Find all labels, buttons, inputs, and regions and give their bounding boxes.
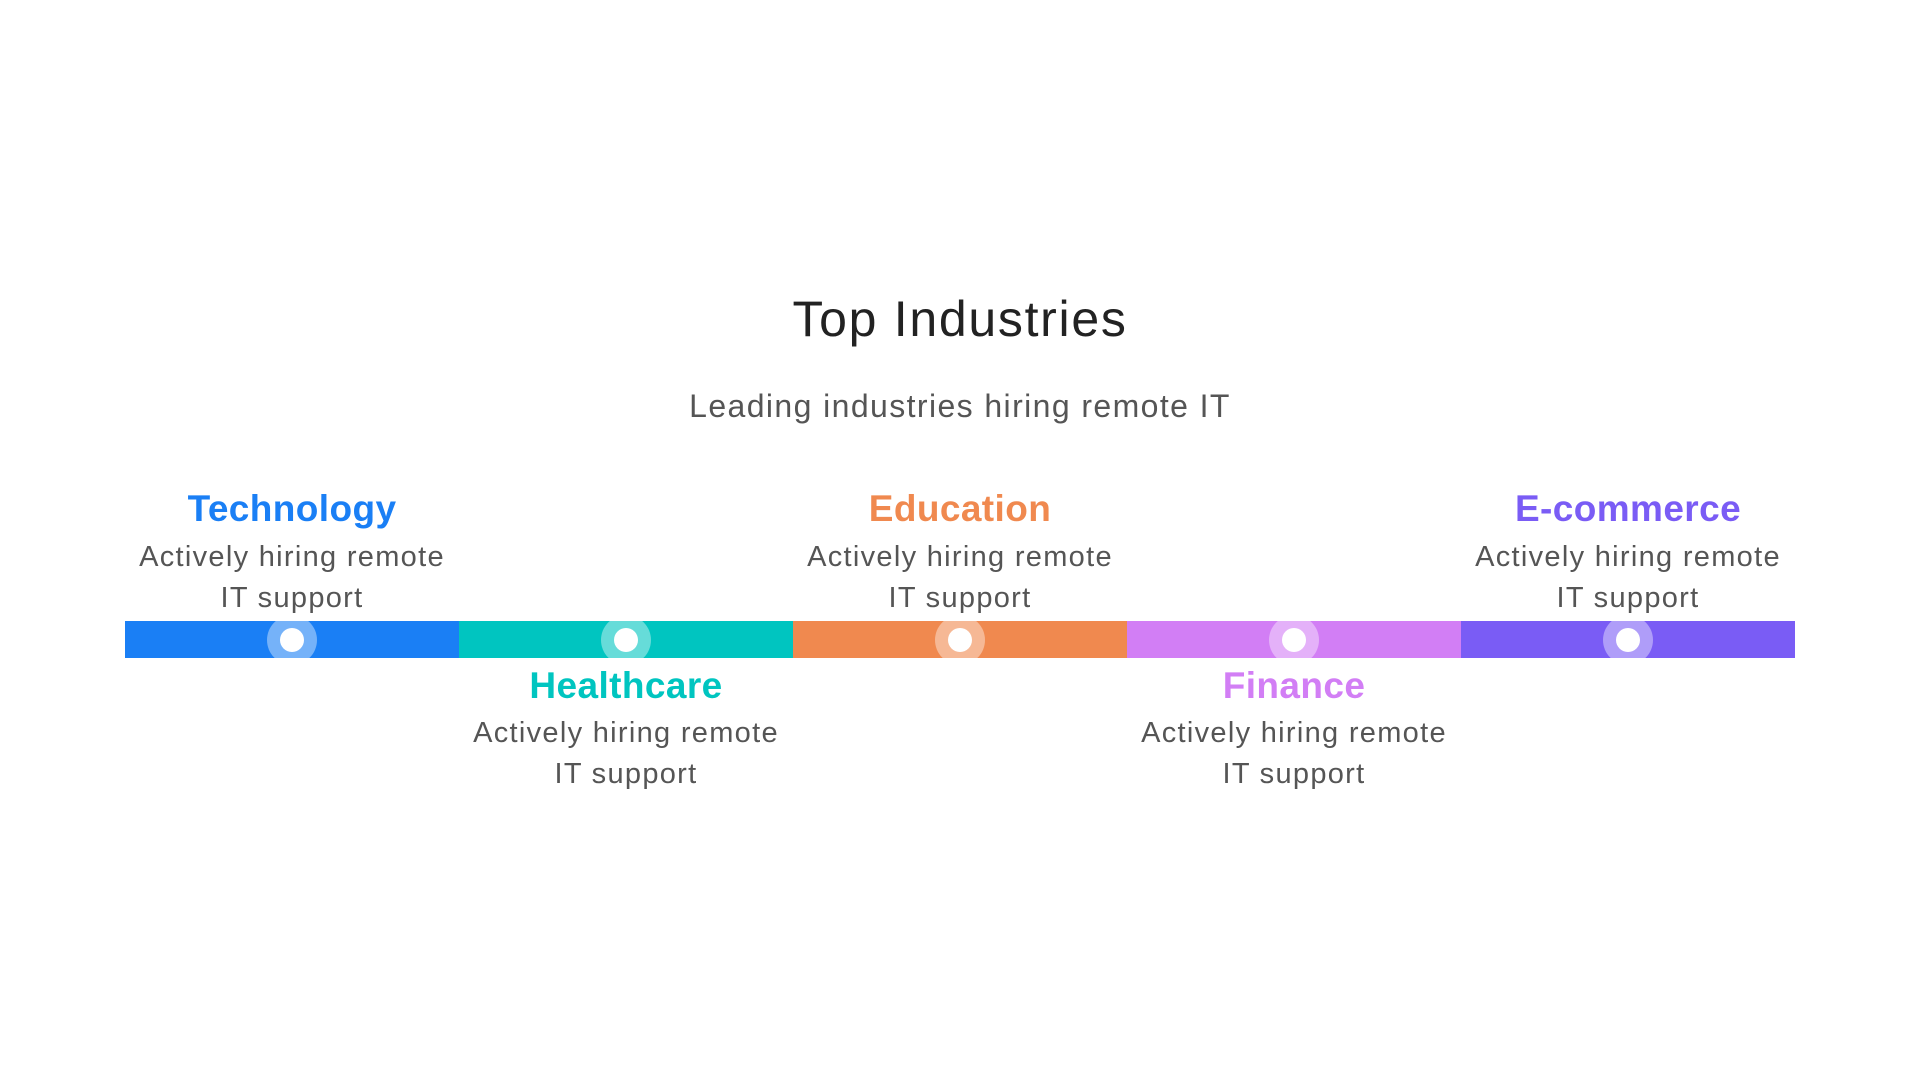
label: healthcare: Actively hiring remote	[473, 717, 779, 749]
segment: healthcare	[459, 621, 793, 658]
subtitle: Leading industries hiring remote IT	[689, 388, 1231, 424]
label: finance	[1141, 665, 1447, 790]
label: technology	[139, 488, 445, 614]
label: education	[807, 488, 1113, 614]
label: technology: Actively hiring remote	[139, 541, 445, 573]
label: education: Actively hiring remote	[807, 541, 1113, 573]
label: e-commerce: Actively hiring remote	[1475, 541, 1781, 573]
label: finance: Finance	[1223, 665, 1365, 706]
label: technology: IT support	[220, 582, 364, 614]
segment: finance	[1127, 621, 1461, 658]
segment: e-commerce	[1461, 621, 1795, 658]
label: technology: Technology	[188, 488, 396, 529]
label: e-commerce	[1475, 488, 1781, 614]
label: finance: Actively hiring remote	[1141, 717, 1447, 749]
label: healthcare: Healthcare	[529, 665, 723, 706]
label: e-commerce: IT support	[1556, 582, 1700, 614]
label: healthcare	[473, 665, 779, 790]
label: e-commerce: E-commerce	[1515, 488, 1741, 529]
label: education: IT support	[888, 582, 1032, 614]
label: finance: IT support	[1222, 758, 1366, 790]
label: healthcare: IT support	[554, 758, 698, 790]
title: Top Industries	[792, 291, 1128, 347]
segment: education	[793, 621, 1127, 658]
segment: technology	[125, 621, 459, 658]
timeline bar	[125, 621, 1795, 658]
label: education: Education	[869, 488, 1051, 529]
